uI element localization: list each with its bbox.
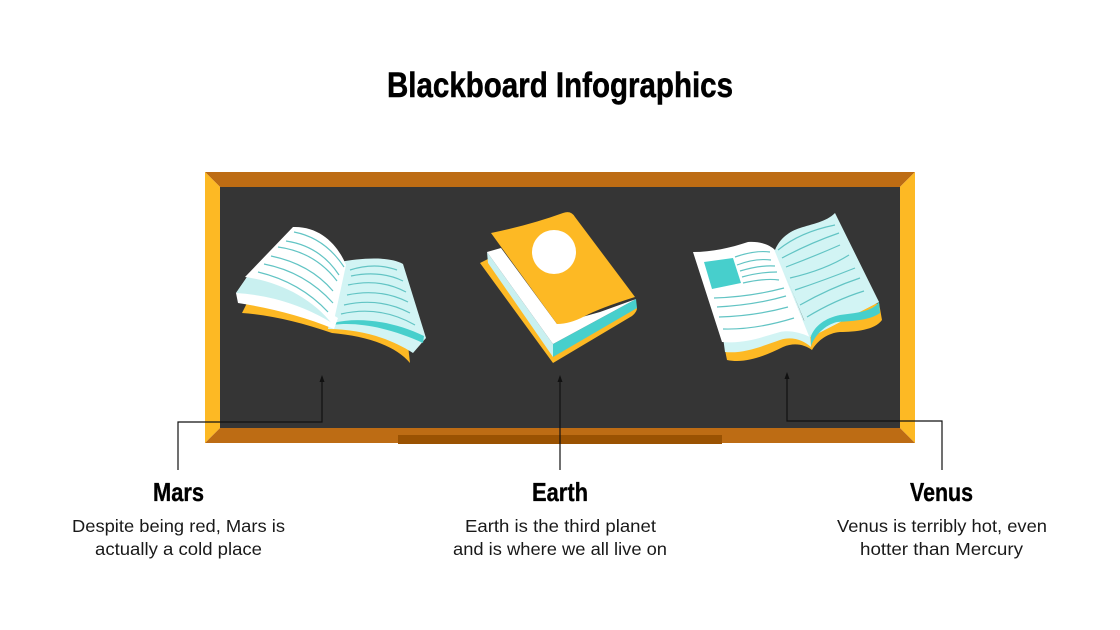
text block: Earth: and is where we all live on [453, 539, 667, 559]
text block: Venus: Venus is terribly hot, even [837, 516, 1047, 536]
text block: Earth: Earth [532, 477, 588, 507]
frame: left [205, 172, 220, 443]
blackboard [205, 172, 915, 444]
frame: top [205, 172, 915, 187]
text block: Mars [72, 477, 285, 559]
frame: right [900, 172, 915, 443]
frame: bottom [205, 428, 915, 443]
arrow: Earth [558, 375, 562, 470]
icon: closed book [480, 212, 637, 363]
arrow: Mars [178, 375, 324, 470]
title: Blackboard Infographics [387, 66, 733, 105]
icon: open book left [236, 227, 426, 363]
text block: Earth: Earth is the third planet [465, 516, 656, 536]
chalk tray [398, 435, 722, 444]
text block: Mars: Mars [153, 477, 204, 507]
text block: Venus: Venus [910, 477, 973, 507]
icon: open book right [693, 213, 882, 361]
text block: Venus [837, 477, 1047, 559]
text block: Earth [453, 477, 667, 559]
text block: Mars: Despite being red, Mars is [72, 516, 285, 536]
chalkboard surface [220, 187, 900, 428]
text block: Venus: hotter than Mercury [860, 539, 1023, 559]
arrow: Venus [784, 372, 942, 470]
text block: Mars: actually a cold place [95, 539, 262, 559]
